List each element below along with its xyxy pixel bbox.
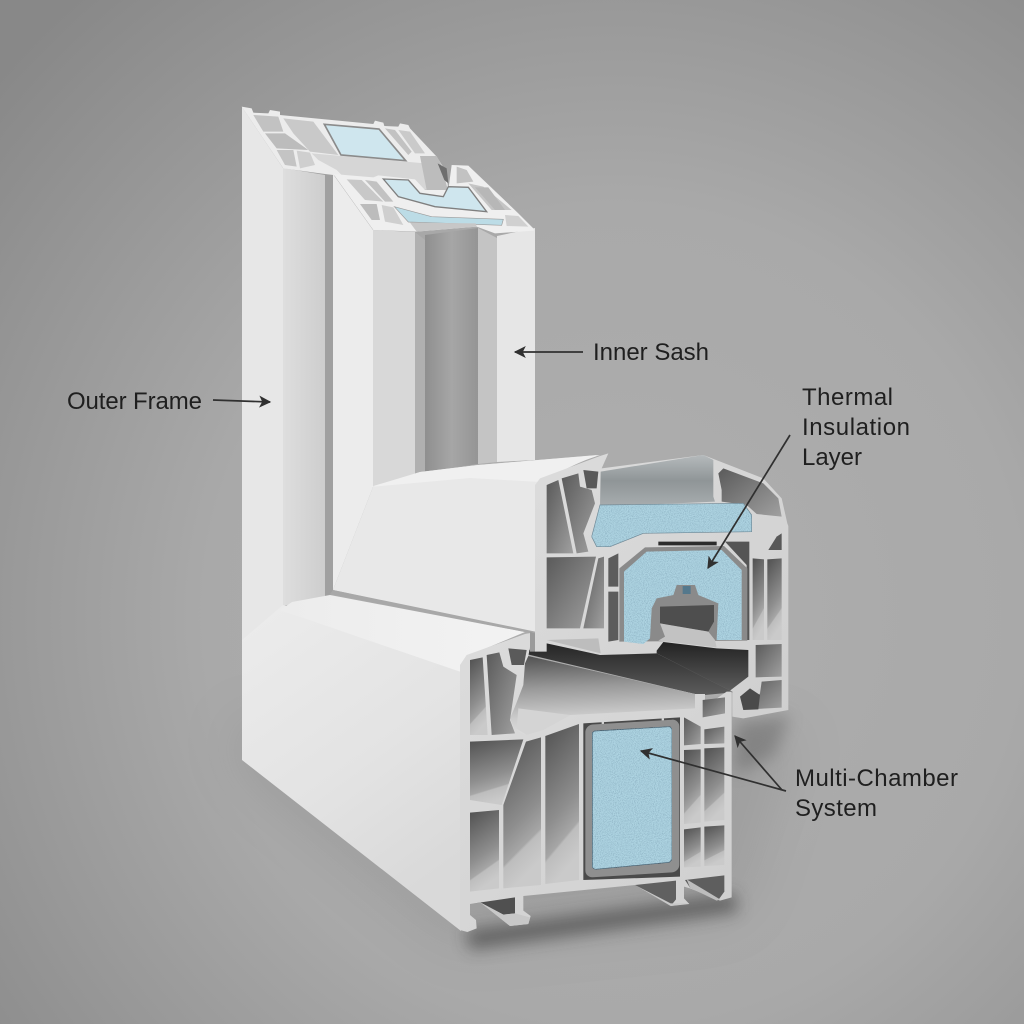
- upper insulation: [592, 503, 752, 547]
- label: outer frame: Outer Frame: [67, 388, 202, 415]
- top cross-section of frame and sash: [242, 107, 534, 233]
- insulation core: [592, 727, 672, 869]
- glazing bead: [600, 455, 715, 507]
- hinge: [740, 688, 760, 710]
- frame top section: [242, 107, 448, 192]
- reinforcement: [585, 719, 679, 878]
- gap shadow: [523, 640, 747, 695]
- chambers: [547, 480, 573, 553]
- outer frame lower member: [242, 595, 525, 931]
- inner core: [660, 605, 714, 632]
- label: multi-chamber system: Multi-Chamber: [795, 765, 958, 792]
- gasket: [583, 470, 598, 488]
- inner sash lower member: [330, 455, 600, 636]
- label: inner sash: Inner Sash: [593, 339, 709, 366]
- outer frame vertical: [242, 107, 333, 660]
- inner sash vertical: [333, 174, 535, 590]
- lower gap: [657, 642, 748, 691]
- steel channel: [619, 546, 747, 642]
- profile body: [535, 453, 788, 718]
- chambers: [470, 657, 488, 735]
- core insulation: [624, 550, 742, 644]
- arrow: inner sash: [515, 351, 583, 353]
- lower frame cross-section: [460, 633, 747, 932]
- bottom feet: [470, 897, 515, 915]
- glazing channel: [510, 656, 695, 735]
- floor shadow: [230, 715, 800, 950]
- gasket: [508, 648, 527, 665]
- upper sash cross-section: [530, 453, 788, 718]
- sash top section: [333, 165, 534, 233]
- hook shadow: [530, 632, 535, 652]
- arrow: thermal insulation: [708, 435, 790, 568]
- arrow: outer frame: [213, 400, 270, 402]
- label: thermal insulation layer: Insulation: [802, 414, 910, 441]
- sash top insulation: [383, 179, 487, 212]
- lower surface: [547, 638, 601, 653]
- arrow: multi-chamber to outer wall: [735, 736, 782, 790]
- frame top insulation: [324, 124, 406, 161]
- arrow: multi-chamber to core: [641, 751, 786, 791]
- label: multi-chamber system: System: [795, 795, 877, 822]
- label: thermal insulation layer: Thermal: [802, 384, 893, 411]
- profile body: [460, 633, 732, 932]
- label: thermal insulation layer: Layer: [802, 444, 862, 471]
